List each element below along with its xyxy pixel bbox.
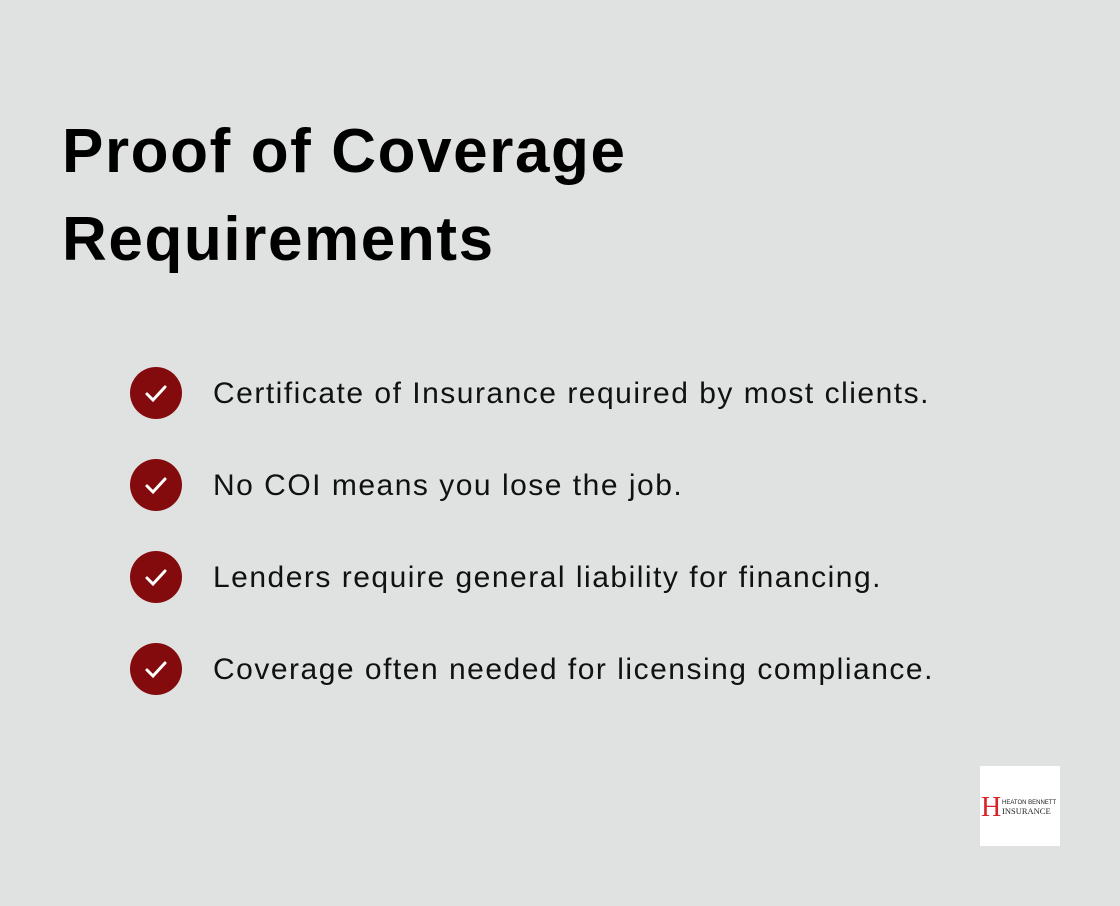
item 3 <box>130 551 882 603</box>
item 4: Coverage often needed for licensing compliance. <box>213 653 934 686</box>
title: Proof of Coverage <box>62 117 627 186</box>
icon: check <box>130 367 182 419</box>
item 2 <box>130 459 683 511</box>
logo: H <box>981 792 1001 823</box>
logo <box>980 766 1060 846</box>
icon: check <box>130 551 182 603</box>
logo: HEATON BENNETT <box>1002 800 1056 806</box>
item 3: Lenders require general liability for financing. <box>213 561 882 594</box>
item 1 <box>130 367 930 419</box>
title <box>62 117 627 274</box>
icon: check <box>130 459 182 511</box>
logo: INSURANCE <box>1002 806 1051 816</box>
item 2: No COI means you lose the job. <box>213 469 683 502</box>
icon: check <box>130 643 182 695</box>
title: Requirements <box>62 205 495 274</box>
item 4 <box>130 643 934 695</box>
item 1: Certificate of Insurance required by most clients. <box>213 377 930 410</box>
